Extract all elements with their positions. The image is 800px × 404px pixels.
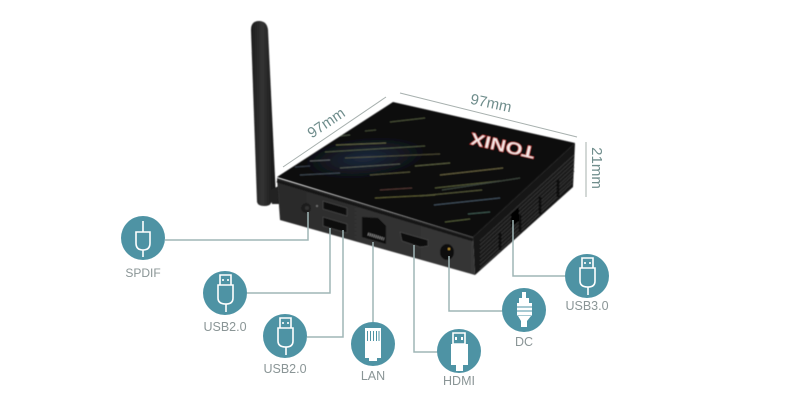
port: DC bbox=[440, 244, 454, 260]
callout: SPDIF: SPDIF bbox=[125, 266, 161, 280]
antenna bbox=[251, 21, 280, 206]
brand logo: TONIX bbox=[468, 128, 537, 162]
connector lines bbox=[165, 212, 565, 352]
callout: USB2.0 right bbox=[263, 314, 307, 376]
port: USB3.0 side bbox=[511, 207, 519, 228]
front panel bbox=[277, 178, 475, 275]
side panel with vents bbox=[473, 143, 575, 275]
icon: USB plug bbox=[580, 258, 595, 295]
port: LAN bbox=[362, 217, 386, 244]
callout: LAN: LAN bbox=[361, 369, 385, 383]
callout: HDMI bbox=[437, 329, 481, 388]
front edge bevel bbox=[277, 181, 473, 240]
icon: DC plug bbox=[517, 292, 532, 327]
callout: LAN bbox=[351, 322, 395, 383]
dimension: depth 97mm bbox=[283, 97, 386, 167]
icon: HDMI plug bbox=[451, 333, 468, 371]
callout: USB3.0 bbox=[565, 254, 609, 313]
callout: USB2.0 left: USB2.0 bbox=[203, 320, 247, 334]
dimension: width 97mm: 97mm bbox=[469, 91, 513, 116]
callout: USB2.0 left bbox=[203, 271, 247, 334]
dimension: depth 97mm: 97mm bbox=[304, 105, 349, 142]
callout: DC: DC bbox=[515, 335, 533, 349]
port: HDMI bbox=[400, 232, 428, 247]
icon: RCA plug bbox=[136, 221, 150, 257]
callout: USB2.0 right: USB2.0 bbox=[263, 362, 307, 376]
port: USB lower bbox=[323, 217, 347, 233]
icon: USB plug bbox=[278, 318, 293, 355]
dimension: width 97mm bbox=[400, 91, 577, 137]
icon: ethernet plug bbox=[365, 328, 381, 361]
top face with streaks bbox=[277, 102, 575, 237]
port: USB upper bbox=[323, 201, 347, 216]
icon: USB plug bbox=[218, 275, 233, 312]
port: SPDIF jack bbox=[301, 203, 318, 213]
callout: USB3.0: USB3.0 bbox=[565, 299, 609, 313]
device: TV box bbox=[277, 102, 575, 275]
callout: HDMI: HDMI bbox=[443, 374, 475, 388]
callout: SPDIF bbox=[121, 216, 165, 280]
callout: DC bbox=[502, 288, 546, 349]
dimension: height 21mm: 21mm bbox=[588, 147, 605, 189]
dimension: height 21mm bbox=[586, 142, 605, 197]
